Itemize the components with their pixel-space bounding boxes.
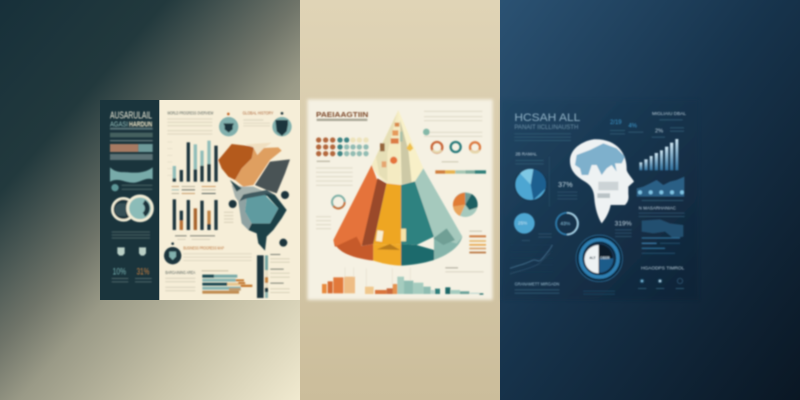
lower left text (165, 270, 195, 291)
bottom dark histogram (445, 287, 483, 295)
lower heading and text: BUSINESS PROGRESS MAP (183, 245, 224, 250)
cone circle marker (390, 157, 397, 164)
stat 319%: 319% (615, 221, 632, 228)
ring gauge (556, 213, 578, 235)
sidebar stat left: 10% (113, 266, 126, 276)
dot matrix (316, 137, 369, 156)
sidebar icon right (139, 247, 146, 256)
sidebar title: AGASI (110, 119, 128, 128)
page heading left (167, 111, 214, 135)
cone tag white left (376, 230, 383, 242)
top small lines (610, 119, 684, 138)
bottom orange histogram (322, 277, 355, 293)
poster: middle, pyramid cone (307, 99, 493, 300)
sidebar title: HARDUN (129, 119, 153, 128)
right stacked legend (469, 231, 486, 253)
middle poster paper (307, 99, 493, 300)
bottom teal histogram (397, 277, 440, 294)
left lower text block (316, 216, 331, 229)
vertical stacked column colored (265, 255, 268, 298)
cone base teal (401, 244, 434, 266)
small blue pie (514, 213, 535, 234)
sidebar stacked stripes (110, 133, 153, 160)
cone upper sage edge (376, 114, 397, 182)
lower left text: BARGAINING AREA (165, 270, 195, 275)
cone base amber notch (377, 244, 400, 250)
left poster dark sidebar (100, 100, 159, 300)
middle title: PAEIAAGTIIN (316, 110, 369, 119)
right section lines (639, 213, 685, 217)
bar chart bottom (173, 199, 218, 230)
right title (514, 112, 580, 141)
map pin one (229, 200, 237, 208)
cone base amber (373, 244, 401, 266)
left text block (316, 161, 353, 186)
top stat 2/19: 2/19 (610, 120, 622, 126)
sidebar title: AUSARULAIL (110, 111, 152, 122)
bar chart top legend (172, 186, 216, 194)
sidebar stat right: 31% (137, 266, 149, 276)
sidebar title (110, 111, 153, 130)
sidebar stat right (135, 266, 152, 282)
map pin three (279, 239, 287, 247)
right mini legend text (270, 254, 290, 293)
cone pyramid (333, 110, 462, 266)
line chart (510, 245, 553, 274)
head world map (575, 143, 625, 175)
horizontal bar chart (202, 270, 252, 294)
head silhouette (570, 139, 634, 223)
top stat 4%: 4% (628, 124, 638, 130)
map pin two (281, 191, 289, 199)
central radial gauge: OBER (600, 256, 610, 260)
cone marker stack (380, 123, 413, 167)
glowing waveform (637, 177, 684, 201)
ascending bar chart (639, 139, 678, 170)
poster: left, map and bar charts (100, 100, 300, 300)
ring lines (522, 233, 552, 241)
bar chart top (167, 141, 218, 182)
section label 2B: 2B RAMAL (515, 151, 538, 156)
lower right heading: HGAODPS TIMROL (641, 266, 685, 271)
cone dark red band (362, 178, 387, 246)
sidebar icon left (117, 247, 125, 256)
bottom left heading: GRANAMETT MIRGADN (515, 281, 559, 286)
cone upper segment left cream (372, 110, 401, 185)
cone base orange (333, 237, 373, 261)
pie chart (453, 192, 478, 217)
top right heading: MIGLIAIU DBAL (652, 111, 687, 116)
bar chart bottom legend (175, 235, 215, 240)
bottom center lines (583, 291, 615, 295)
head text card (597, 182, 618, 198)
section label 2B (515, 151, 549, 207)
lower portrait icon (164, 242, 181, 264)
page heading right (243, 111, 273, 126)
sidebar text block (112, 231, 150, 239)
small donut left accent (333, 202, 345, 208)
central radial gauge: ALT (589, 256, 596, 260)
right section heading: N MASARHANIAC (639, 205, 676, 210)
three ring charts (432, 142, 480, 153)
cone pale teal face (415, 168, 462, 243)
sidebar stat left (112, 266, 128, 282)
small blue pie: 25% (518, 221, 527, 226)
large pie (515, 169, 546, 200)
cone upper olive sliver (400, 120, 412, 184)
page heading left: WORLD PROGRESS OVERVIEW (167, 111, 214, 116)
portrait icon two (272, 112, 292, 136)
portrait icon one (219, 113, 238, 136)
lower heading and text (183, 245, 252, 261)
left poster cream page (159, 100, 300, 300)
horizontal data rows (642, 237, 680, 254)
three bottom icons (638, 278, 684, 289)
cone pale notch (433, 228, 455, 245)
page heading right: GLOBAL HISTORY (243, 111, 273, 116)
ring gauge: 43% (560, 221, 571, 227)
lower right note (445, 267, 484, 272)
stat 37%: 37% (558, 180, 573, 189)
sidebar small dot and lines (111, 184, 152, 191)
map (218, 143, 290, 251)
teal dot (423, 129, 430, 135)
left background gradient (0, 0, 300, 400)
top right text block (424, 111, 482, 137)
sidebar overlapping donuts (112, 196, 152, 221)
cone upper segment right (398, 110, 423, 185)
segmented stripe (435, 161, 486, 174)
small donut left (332, 196, 345, 208)
middle background panel (300, 0, 500, 400)
bottom left heading (515, 281, 559, 294)
histogram thin lines (345, 267, 411, 287)
top stat 2%: 2% (655, 128, 663, 134)
vertical stacked column dark (257, 255, 264, 298)
cone teal face (401, 181, 434, 245)
cone amber face (373, 183, 401, 245)
sidebar area chart (110, 167, 153, 183)
cone orange face (333, 165, 377, 247)
stat 319 lines (615, 229, 632, 237)
cone tag white right (401, 229, 406, 241)
map small text block (224, 212, 233, 223)
right background gradient (500, 0, 800, 400)
faint world map panel (642, 219, 683, 238)
poster: right, head and dashboard (502, 100, 698, 300)
cone base pale teal (434, 237, 462, 260)
central radial gauge (576, 235, 623, 282)
right title: HCSAH ALL (514, 112, 580, 124)
right poster panel (502, 100, 698, 300)
bottom middle histogram (365, 284, 397, 294)
right title: PANAIT IICLLINAUSTH (514, 125, 578, 131)
stat lines (557, 192, 577, 199)
